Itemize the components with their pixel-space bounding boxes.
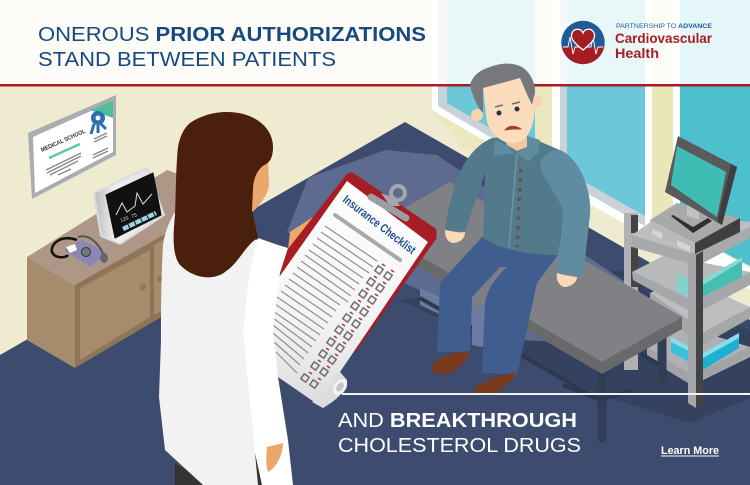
logo badge [561,21,605,64]
blue box [671,333,739,370]
trousers [175,463,210,485]
legs [437,236,558,375]
back wall [0,0,750,360]
certificate [28,95,116,199]
logo text: PARTNERSHIP TO ADVANCE [616,23,712,30]
icon: ribbon [91,111,106,134]
checklist heading bar [335,215,400,260]
logo [561,21,713,64]
header rule [0,84,750,86]
exam bench [370,182,682,438]
top shelf [632,212,750,254]
bottom caption: CHOLESTEROL DRUGS [338,435,581,457]
floor shadow under bench [400,270,750,423]
blood pressure cuff [52,236,108,267]
shirt [445,136,590,277]
certificate heading: MEDICAL SCHOOL [40,129,87,154]
doctor hand at side [266,443,283,472]
logo text [615,23,713,61]
computer monitor [665,136,737,233]
doctor [159,112,313,485]
checklist title: Insurance Checklist [340,192,419,257]
logo text: Health [615,46,659,61]
doctor sleeve [243,238,293,485]
title [38,24,426,71]
clipboard clip [371,186,406,218]
teal box [677,257,742,297]
bottom caption [338,410,581,457]
vital signs monitor: 120 [120,215,130,224]
vital signs monitor [94,168,164,244]
third shelf [650,278,750,333]
clipboard [269,174,435,408]
hands [445,230,577,287]
checklist lines [273,226,377,373]
computer base [650,203,740,254]
hair [174,112,273,277]
coat slit shadow [255,453,262,485]
equipment cart [624,136,750,408]
checkboxes [301,266,392,388]
header overlay band [0,0,750,84]
logo text: Cardiovascular [615,31,713,46]
bench lower shelf shadow [420,288,525,345]
vital signs monitor: 75 [131,212,138,220]
neck [503,130,527,151]
coat [159,205,258,485]
collar [494,136,540,162]
patient [431,64,590,395]
floor [0,122,750,485]
cabinet [27,170,190,368]
second shelf [632,255,750,298]
bottom shelf [647,325,750,383]
face [248,160,269,212]
learn more link: Learn More [661,445,719,457]
red check marks [309,264,394,380]
head [470,64,543,143]
windows [432,0,750,290]
bottom caption: AND BREAKTHROUGH [338,410,577,432]
shoes [431,351,516,395]
rug [287,150,640,345]
divider line [342,393,750,395]
title: ONEROUS PRIOR AUTHORIZATIONS [38,24,426,46]
title: STAND BETWEEN PATIENTS [38,49,336,71]
doctor hand on clipboard [288,217,313,250]
paper roll [312,372,350,408]
front post [688,251,703,408]
checklist paper [269,181,428,408]
